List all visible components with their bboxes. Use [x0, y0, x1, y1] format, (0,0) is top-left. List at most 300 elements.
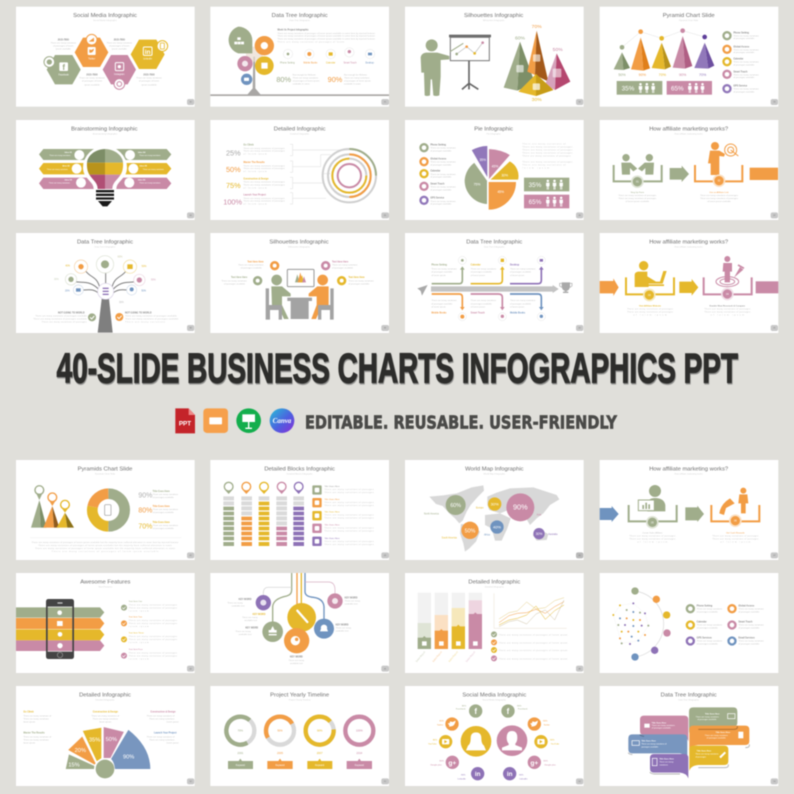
slide: how affiliate marketing works (handshake): How affiliate marketing works [675, 132, 703, 135]
feature list: of passages available [738, 627, 760, 629]
green tray and step marker [614, 165, 662, 188]
bubble text: Title Goes Here [705, 712, 720, 715]
divider and paragraph: There are many variations of passages of lorem ipsum available [52, 550, 159, 553]
slide: social media infographic: Social Media Infographic [93, 19, 118, 22]
tag boxes: Keyword [315, 764, 325, 767]
captions: ipsum available [84, 84, 100, 86]
side list: There are many variations of passages [324, 491, 375, 494]
pyramid percent labels: 50% [553, 47, 563, 53]
percentages: of passages of lorem ipsum [293, 79, 320, 82]
percent labels and text: 75% [226, 181, 241, 190]
bubble text: There are many variations of [641, 743, 667, 746]
percent labels and text [223, 148, 243, 206]
tree leaves [65, 256, 145, 299]
captions: There are many variations of passages [627, 311, 674, 314]
slide: data tree speech bubbles: Data Tree Infographic [661, 693, 717, 699]
divider and paragraph: There are many variations of passages of lorem ipsum available but the majority have suffered alteration in some [35, 547, 176, 550]
captions: Calendar [471, 265, 481, 267]
captions: There are many variations of passages [618, 194, 657, 197]
social labels: 80% [517, 705, 522, 707]
intro text [277, 29, 375, 44]
captions: KEY WORD [245, 628, 258, 630]
captions: KEY WORD [345, 597, 358, 599]
feature list: of passages available [697, 643, 718, 645]
pink tray and step marker: 04 [726, 294, 729, 296]
line chart [494, 593, 567, 628]
percentages: Not enough for Website [344, 73, 368, 76]
feature list: Smart Touch [738, 620, 753, 623]
social labels: 80% [543, 721, 548, 723]
feature list: GPS Services [697, 637, 713, 639]
orange tray and step marker [711, 505, 759, 527]
social labels: Facebook [456, 709, 466, 711]
side list: Title Goes Here [324, 523, 340, 526]
slide: brainstorming bulb [16, 120, 195, 220]
feature list: There are many variations [733, 61, 760, 64]
slide: data tree speech bubbles [600, 686, 778, 786]
captions [431, 264, 536, 315]
bottom notes: There are many variations of passages available [125, 318, 179, 321]
paragraph: There are many variations of passages [522, 151, 573, 154]
3D pyramids [504, 31, 570, 96]
callouts: There are many variations [238, 264, 264, 267]
icon: canva: Canva [273, 417, 292, 425]
slide: project yearly timeline [210, 686, 389, 786]
fan labels: 20% [75, 748, 86, 754]
dot network [612, 602, 649, 645]
side text: lorem ipsum [23, 720, 35, 723]
tree trunk and ground [210, 47, 389, 96]
feature list: Phone Setting [733, 31, 750, 34]
social labels: 80% [462, 705, 466, 707]
social icons right [501, 704, 548, 780]
concentric rings [323, 149, 376, 202]
slide: detailed rings: of lorem ipsum [243, 203, 267, 206]
fan labels [68, 737, 134, 769]
slide: detailed rings: Launch Your Project [243, 193, 266, 196]
icon: google slides [203, 408, 228, 433]
percent row: 70% [659, 73, 667, 77]
female avatar [461, 726, 491, 757]
side text: lorem ipsum [23, 741, 35, 744]
slide: detailed blocks: 43 [384, 555, 387, 557]
captions: There are many variations of passages [712, 535, 759, 538]
captions: There are many variations of passages [700, 194, 739, 197]
side list: Title Goes Here [324, 498, 340, 501]
slide: awesome features phone: Start Features [98, 585, 112, 588]
captions: of lorem ipsum [431, 274, 446, 277]
slide: detailed fan chart: Detailed Infographic [79, 693, 131, 699]
tagline: EDITABLE. REUSABLE. USER-FRIENDLY [305, 413, 618, 434]
social labels: 80% [550, 740, 555, 742]
percentages: 80% [276, 75, 291, 84]
captions: of passages available [510, 303, 532, 305]
slide: data tree with five leaves: Data Tree Infographic [272, 13, 328, 19]
bulb [85, 148, 125, 206]
social icons left: f [474, 707, 477, 716]
feature list: Global Access [733, 45, 750, 48]
captions: There are many variations [510, 299, 536, 302]
slide: hanging circles [210, 573, 389, 673]
percentages [276, 73, 371, 85]
feature list: Phone Setting [697, 604, 713, 607]
slide: silhouettes meeting: 39 [384, 328, 387, 330]
orange arrow [600, 278, 619, 296]
feature list: of passages available [733, 64, 755, 66]
bubble text: Title Goes Here [641, 740, 657, 743]
captions [618, 191, 739, 203]
slide: how affiliate marketing works (computer) [600, 460, 778, 560]
arrows: Idea 04 [138, 151, 146, 154]
slide: project yearly timeline: 51 [384, 781, 386, 783]
side list: There are many variations of passages [324, 504, 375, 507]
stat bar: 35%: 35% [622, 85, 635, 92]
bottom notes: NOT GOING TO WORLD [58, 313, 85, 315]
pie labels [474, 158, 508, 194]
slide: detailed bars and line chart: Detailed Infographic [468, 579, 520, 585]
side text: There are many variations of [147, 714, 175, 717]
feature list: There are many variations [738, 624, 765, 627]
arc and nodes [631, 587, 671, 661]
pie labels: 45% [492, 164, 498, 168]
percent row: 90% [639, 73, 647, 77]
slide: detailed blocks: Detailed Blocks Infographic [264, 466, 335, 472]
seated people [271, 275, 329, 319]
slide: pyramid chart: 33 [773, 102, 776, 104]
ring values: 90% [317, 729, 323, 733]
feature list: of passages available [733, 52, 755, 54]
slide: how affiliate marketing works (handshake) [600, 120, 778, 220]
main arrow [431, 285, 559, 293]
bubble text: of passages available [707, 738, 727, 740]
slide: data tree with branches: Data Tree Infographic [95, 245, 116, 248]
feature list: of passages available [733, 91, 755, 93]
slide: silhouettes presenter: 32 [579, 102, 581, 104]
callouts: Text Here Here [247, 260, 264, 263]
captions: Phone Setting [431, 264, 448, 267]
slide: pyramids chart with donut [16, 460, 195, 560]
feature items: lorem ipsum [129, 625, 149, 628]
slide: brainstorming bulb: 34 [190, 215, 193, 217]
side text: There are many variations of [23, 735, 52, 738]
ring values: 100% [356, 729, 363, 733]
captions: There are many variations [107, 42, 133, 45]
phone [46, 599, 74, 659]
legend: There are many variations of passages of lorem ipsum [499, 641, 568, 644]
captions: of passages of lorem [82, 80, 102, 83]
side text [23, 710, 179, 744]
years: 2014 [356, 751, 363, 755]
pink block tail [756, 281, 778, 293]
fan labels: 15% [68, 763, 80, 769]
slide: project yearly timeline: Project Yearly Timeline [270, 693, 329, 699]
captions: of lorem ipsum available [626, 200, 650, 203]
captions: of lorem ipsum [637, 541, 668, 544]
intro text: There are many variations of passages of lorem ipsum available in some form by injected humour [277, 35, 375, 38]
feature items: lorem ipsum [129, 641, 149, 644]
feature list: of passages available [697, 627, 718, 629]
slide: detailed rings: There are many variations of passages [243, 181, 286, 184]
captions: KEY WORD [290, 657, 303, 659]
feature list: Smart Touch [733, 70, 748, 73]
captions: There are many variations of passages [627, 308, 674, 311]
orange person and target [708, 142, 738, 175]
rotated bar labels: Sales Report [465, 650, 476, 663]
slide: pyramids chart with donut: of passages available [153, 528, 174, 530]
fan labels: 50% [106, 737, 117, 743]
callouts [221, 260, 375, 285]
feature items: There are many variations of passages [129, 622, 178, 625]
social labels: 80% [461, 775, 466, 777]
slide: how affiliate marketing works (laptop): How affiliate marketing works [675, 245, 703, 248]
slide: data tree speech bubbles: Data Tree Infographic [678, 699, 700, 702]
arrows: Idea 03 [65, 179, 73, 181]
person with target pin [716, 256, 744, 287]
captions: There are many variations of passages [618, 197, 657, 200]
slide: detailed bars and line chart: 48 [579, 668, 582, 670]
slide: detailed rings: of lorem ipsum [243, 153, 267, 156]
feature list: There are many variations [430, 161, 457, 164]
side text: lorem ipsum [167, 720, 179, 723]
column bars [418, 593, 482, 649]
slide: social media infographic: Social Media Infographic [73, 13, 137, 19]
callouts: of passages available [332, 268, 354, 270]
icon row: Phone Setting [280, 62, 295, 65]
captions: available text [290, 662, 303, 665]
feature list: There are many variations [738, 608, 765, 611]
side list: There are many variations of passages [324, 517, 375, 520]
percent labels: 50% [142, 266, 146, 268]
slide: detailed rings: of lorem ipsum [243, 186, 267, 189]
feature list: There are many variations [430, 173, 457, 176]
slide: how affiliate marketing works (laptop): 41 [773, 328, 775, 330]
map labels: Asia [537, 514, 542, 517]
feature items: There are many variations of passages [129, 619, 178, 622]
captions: available text [345, 603, 358, 606]
slide: how affiliate marketing works (laptop): How affiliate marketing works? [649, 239, 729, 245]
presentation board [449, 35, 491, 89]
map labels: North America [424, 512, 439, 515]
arrows: Idea 06 [138, 179, 146, 181]
feature items: There are many variations of passages [129, 635, 178, 638]
map labels: Europe [476, 507, 484, 510]
captions: Double Shot Research & Compare [710, 305, 746, 308]
bottom notes: There are many variations of passages available [35, 315, 88, 318]
captions: available text [336, 630, 349, 633]
feature list: of passages available [733, 38, 755, 40]
hexagon: facebook: Facebook [59, 75, 70, 77]
feature list: Calendar [697, 621, 707, 623]
pink tray and step marker [704, 277, 752, 300]
icon row [280, 48, 375, 65]
captions: There are many variations [471, 299, 497, 302]
tree leaves [229, 27, 274, 85]
callouts: Text Here Here [332, 260, 349, 263]
captions [629, 531, 759, 544]
green tray and step marker: 05 [651, 522, 654, 524]
slide: pyramids chart with donut: There are many variations [153, 524, 179, 527]
social labels: Google plus [544, 764, 556, 766]
feature list: of passages available [430, 204, 452, 206]
slide: pyramids chart with donut: of passages available [153, 497, 174, 499]
slide: how affiliate marketing works (laptop) [600, 233, 778, 333]
map bubbles: 60% [450, 503, 461, 509]
ring values: 70% [238, 729, 244, 733]
rotated bar labels: Sales Report [432, 650, 443, 663]
social labels [428, 705, 560, 780]
hexagon: linkedin [131, 40, 168, 69]
feature list: of passages available [738, 643, 760, 645]
slide: pyramids chart with donut: 42 [190, 555, 192, 557]
captions: ipsum available [112, 49, 128, 51]
stat bar: 65%: 65% [671, 85, 684, 92]
speech bubbles [628, 707, 749, 778]
captions: There are many variations [431, 299, 458, 302]
bubble text: Title Goes Here [652, 721, 667, 724]
feature items: There are many variations of passages [129, 651, 178, 654]
third row left slides [16, 233, 738, 434]
social icons right: f [507, 707, 510, 716]
captions: ipsum available [141, 84, 157, 86]
slide: fishbone data tree: 40 [579, 328, 582, 330]
slide: detailed rings: Detailed Infographic [274, 126, 326, 132]
captions: There are many [336, 627, 352, 630]
slide: world map: World Map Infographic [465, 466, 524, 472]
percent labels: 20% [65, 291, 70, 293]
social icons left: in [475, 771, 481, 778]
slide: awesome features phone: 44 [190, 668, 193, 670]
feature items: Text Item Two [129, 616, 143, 619]
percent row: 90% [679, 73, 687, 77]
slide: data tree with branches: Data Tree Infographic [77, 239, 133, 245]
arrows: Idea 02 [62, 166, 70, 168]
slide: brainstorming bulb: Brainstorming Infographic [71, 126, 138, 132]
captions: There are many variations of passages [700, 197, 739, 200]
map bubbles: 30% [536, 532, 542, 536]
callouts: of passages available [348, 283, 370, 285]
captions: of passages available [471, 272, 492, 274]
captions [51, 40, 163, 86]
slide: silhouettes meeting [210, 233, 389, 333]
percent row: 50% [618, 73, 626, 77]
slide: pie infographic: Pie Infographic [486, 132, 502, 135]
slide: social media infographic: 30 [190, 102, 193, 104]
bubble text: There are many [659, 761, 673, 764]
side text: There are many variations [149, 738, 175, 741]
pie labels: 75% [474, 183, 480, 187]
icon row: Smart Touch [343, 62, 357, 65]
paragraph: There are many variations of [522, 142, 566, 145]
slide: detailed rings: There are many variations of passages [243, 164, 286, 167]
percent labels: 30% [119, 302, 124, 304]
captions: of lorem ipsum [633, 314, 667, 317]
feature list [419, 143, 457, 206]
yellow column [259, 502, 269, 546]
social labels: 80% [433, 740, 437, 742]
bubble text: passages available [641, 746, 659, 748]
divider and paragraph: There are many variations of passages of lorem ipsum available but the majority have suffered alteration in some [38, 544, 172, 547]
percentages: available in some [344, 83, 362, 85]
captions: Desktop [510, 264, 520, 267]
captions: of passages available [471, 303, 492, 305]
feature list: There are many variations [733, 34, 760, 37]
captions: Visit Affiliate Website [639, 305, 662, 308]
percent row: 70% [699, 73, 707, 77]
slide: pyramids chart with donut: Pyramids Chart Slide [78, 466, 132, 472]
side text: lorem ipsum [167, 741, 179, 744]
social labels: Twitter [437, 723, 443, 726]
slide: detailed rings: There are many variations of passages [243, 183, 286, 186]
feature items: Text Item One [129, 600, 143, 603]
feature items: Text Item Four [129, 648, 143, 651]
captions: There are many [289, 659, 305, 662]
arrows [39, 149, 171, 189]
captions: There are many variations [79, 77, 106, 80]
orange tray and step marker [695, 165, 742, 187]
slide: detailed bars and line chart: Detailed Infographic [485, 585, 505, 588]
blue arrow [600, 506, 619, 522]
bottom notes: There are many variations of passages [42, 321, 88, 324]
handshake people [621, 154, 654, 175]
feature items: There are many variations of passages [129, 654, 178, 657]
slide: pyramids chart with donut: Title Goes Here [153, 521, 170, 524]
slide: fishbone data tree: Data Tree Infographic [484, 245, 506, 248]
bubble text: Title Goes Here [659, 758, 675, 761]
fan labels: 90% [123, 754, 134, 760]
slide: pie infographic [405, 120, 584, 220]
captions: Smart Touch [471, 312, 485, 315]
third row right slides [405, 233, 778, 333]
icon: canva [270, 408, 294, 433]
percent list: 70% [138, 524, 152, 531]
chairs and table [266, 288, 334, 320]
slide: detailed rings: There are many variations of passages [243, 200, 286, 203]
slide: detailed rings: 35 [384, 215, 387, 217]
hexagon: linkedin: LinkedIn [143, 58, 153, 60]
hexagon: twitter: Twitter [88, 57, 95, 60]
percent labels and text: 100% [223, 197, 243, 206]
captions: There are many [242, 616, 258, 619]
captions [227, 597, 361, 665]
bubble text: Title Goes Here [716, 731, 731, 734]
captions: of lorem ipsum [720, 541, 751, 544]
bubble text: There are many variations [695, 753, 718, 756]
ribbons [16, 607, 104, 651]
phone in donut [105, 505, 111, 515]
social icons left: g+ [448, 760, 456, 767]
paragraph: lorem ipsum [522, 167, 549, 170]
map labels: Australia [548, 533, 558, 536]
slide: hanging circles: 45 [384, 668, 387, 670]
map bubbles: 30% [491, 502, 499, 507]
arrows: There are many variations [47, 168, 68, 171]
side text: lorem ipsum [99, 720, 111, 723]
orange tray and step marker: 02 [718, 181, 721, 183]
side list: Title Goes Here [324, 485, 340, 488]
fourth and fifth row right slides [405, 460, 778, 673]
slide: pyramid chart: Pyramid Chart Slide [663, 13, 715, 19]
percentages: available in some [293, 83, 310, 85]
slide: world map: World Map Infographic [484, 472, 506, 475]
slide: detailed rings: Construction & Design [243, 177, 269, 180]
icon: keynote [236, 408, 261, 433]
captions: Mobile Books [431, 313, 447, 315]
feature list: of passages available [697, 611, 718, 613]
captions: There are many variations [510, 267, 536, 270]
legend: There are many variations of passages of lorem ipsum [499, 633, 568, 636]
side list: There are many variations of passages [324, 501, 375, 504]
leaf icons [68, 260, 142, 295]
